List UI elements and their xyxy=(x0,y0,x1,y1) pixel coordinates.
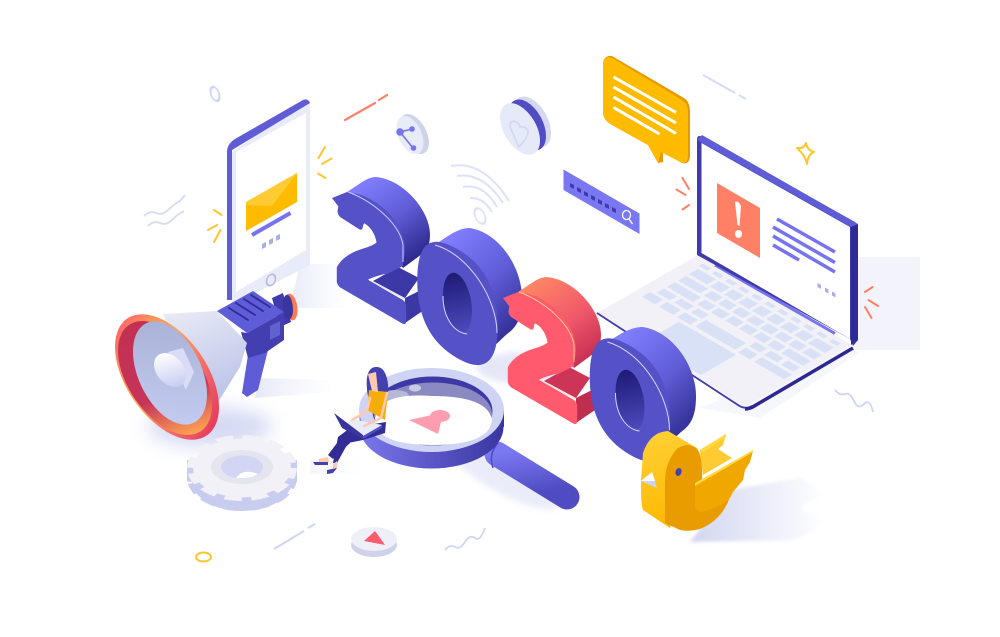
megaphone ring xyxy=(115,292,219,462)
laptop screen xyxy=(697,135,858,346)
shoes xyxy=(313,457,337,474)
face xyxy=(368,372,378,392)
magnifier side xyxy=(360,386,504,468)
megaphone speaker dome xyxy=(154,348,194,392)
legs xyxy=(328,422,386,463)
laptop xyxy=(597,135,858,409)
icon: yellow sparkle xyxy=(797,143,814,164)
play button xyxy=(351,527,397,557)
digit: second 0: 0 xyxy=(584,289,676,512)
icon: envelope xyxy=(246,173,297,231)
bird body front xyxy=(665,445,730,531)
magnifier ring top xyxy=(359,368,504,452)
back wing xyxy=(700,434,732,475)
gear top xyxy=(192,438,292,498)
gear xyxy=(187,438,297,511)
laptop xyxy=(334,413,382,439)
sparks: phone xyxy=(208,147,332,242)
decoration: ring top left xyxy=(210,85,220,103)
megaphone cone xyxy=(163,311,247,432)
woman with laptop xyxy=(313,367,388,474)
decoration: squiggle left xyxy=(144,195,185,226)
magnifier handle xyxy=(478,441,567,497)
magnifier lens xyxy=(372,376,492,446)
megaphone handle xyxy=(242,350,268,397)
decoration: yellow ring xyxy=(196,552,211,562)
icon: pink person xyxy=(409,410,450,434)
arms xyxy=(352,393,387,426)
hair xyxy=(367,367,388,396)
laptop hinge xyxy=(715,265,835,334)
alert box xyxy=(717,183,760,258)
keyboard xyxy=(604,263,843,401)
gear side xyxy=(187,448,297,511)
beak xyxy=(641,472,657,488)
eye xyxy=(674,467,683,477)
digit: second 2: 2 xyxy=(507,254,579,453)
sparks: laptop xyxy=(676,178,878,318)
decoration: red dashes top xyxy=(345,95,387,120)
search bar xyxy=(564,170,640,234)
digit: first 0: 0 xyxy=(412,192,504,415)
megaphone back cap xyxy=(272,291,298,327)
decoration: squiggle right xyxy=(835,390,873,412)
megaphone xyxy=(115,291,298,462)
icon: heart disc xyxy=(500,88,551,164)
bird body side xyxy=(641,431,703,528)
icon: phone xyxy=(227,99,310,305)
ground shadows xyxy=(148,257,920,542)
torso xyxy=(367,390,388,420)
icon: share disc xyxy=(396,107,429,161)
decoration: squiggle bottom xyxy=(445,528,485,550)
digit: first 2: 2 xyxy=(336,154,408,353)
magnifier xyxy=(359,368,567,497)
decoration: lavender dashes top right xyxy=(703,75,746,99)
laptop base xyxy=(597,255,853,409)
bird xyxy=(641,431,753,531)
text lines on screen xyxy=(773,219,835,272)
decoration: lavender dashes bottom xyxy=(274,524,315,549)
front wing xyxy=(695,450,753,512)
icon: speech bubble xyxy=(603,56,690,163)
icon: wifi waves xyxy=(451,165,509,226)
megaphone grip xyxy=(217,291,284,358)
